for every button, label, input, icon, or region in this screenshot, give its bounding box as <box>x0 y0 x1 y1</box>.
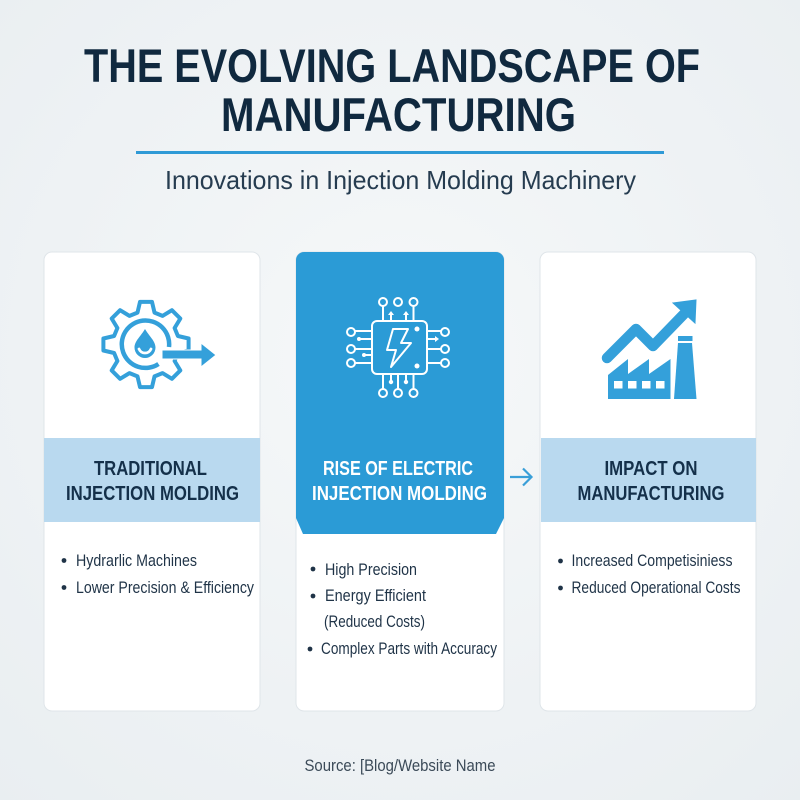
heading: INJECTION MOLDING <box>312 483 487 505</box>
subtitle: Innovations in Injection Molding Machinery <box>165 165 636 195</box>
heading: INJECTION MOLDING <box>66 483 239 505</box>
bullet list: Lower Precision & Efficiency <box>76 578 254 597</box>
heading <box>578 458 724 505</box>
heading: RISE OF ELECTRIC <box>323 458 473 480</box>
icon: gear with water drop and arrow <box>103 302 216 387</box>
bullet list: Hydrarlic Machines <box>76 551 197 570</box>
blue header <box>296 252 504 534</box>
panel: traditional injection molding <box>44 252 260 711</box>
panel: rise of electric injection molding <box>296 252 504 711</box>
heading: MANUFACTURING <box>578 483 724 505</box>
bullet list: Complex Parts with Accuracy <box>321 639 497 658</box>
heading: IMPACT ON <box>604 458 698 480</box>
title: MANUFACTURING <box>221 88 576 141</box>
icon: chip with lightning bolt <box>347 298 449 397</box>
heading: TRADITIONAL <box>94 458 207 480</box>
bullet list: Reduced Operational Costs <box>572 578 740 597</box>
heading <box>312 458 487 505</box>
bullet list: Increased Competisiniess <box>572 551 732 570</box>
bullet list: High Precision <box>325 560 417 579</box>
heading band <box>44 438 260 522</box>
title <box>84 39 700 141</box>
panel: impact on manufacturing <box>540 252 756 711</box>
heading <box>66 458 239 505</box>
bullet list <box>558 551 740 597</box>
bullet list <box>62 551 254 597</box>
icon: factory with rising arrow <box>607 300 696 399</box>
bullet list <box>308 560 497 658</box>
bullet list: Energy Efficient <box>325 586 426 605</box>
title underline <box>136 151 664 154</box>
source line: Source: [Blog/Website Name <box>304 756 496 775</box>
bullet list: (Reduced Costs) <box>324 612 425 631</box>
arrow between panels <box>510 468 532 486</box>
title: THE EVOLVING LANDSCAPE OF <box>84 39 700 92</box>
heading band <box>541 438 756 522</box>
